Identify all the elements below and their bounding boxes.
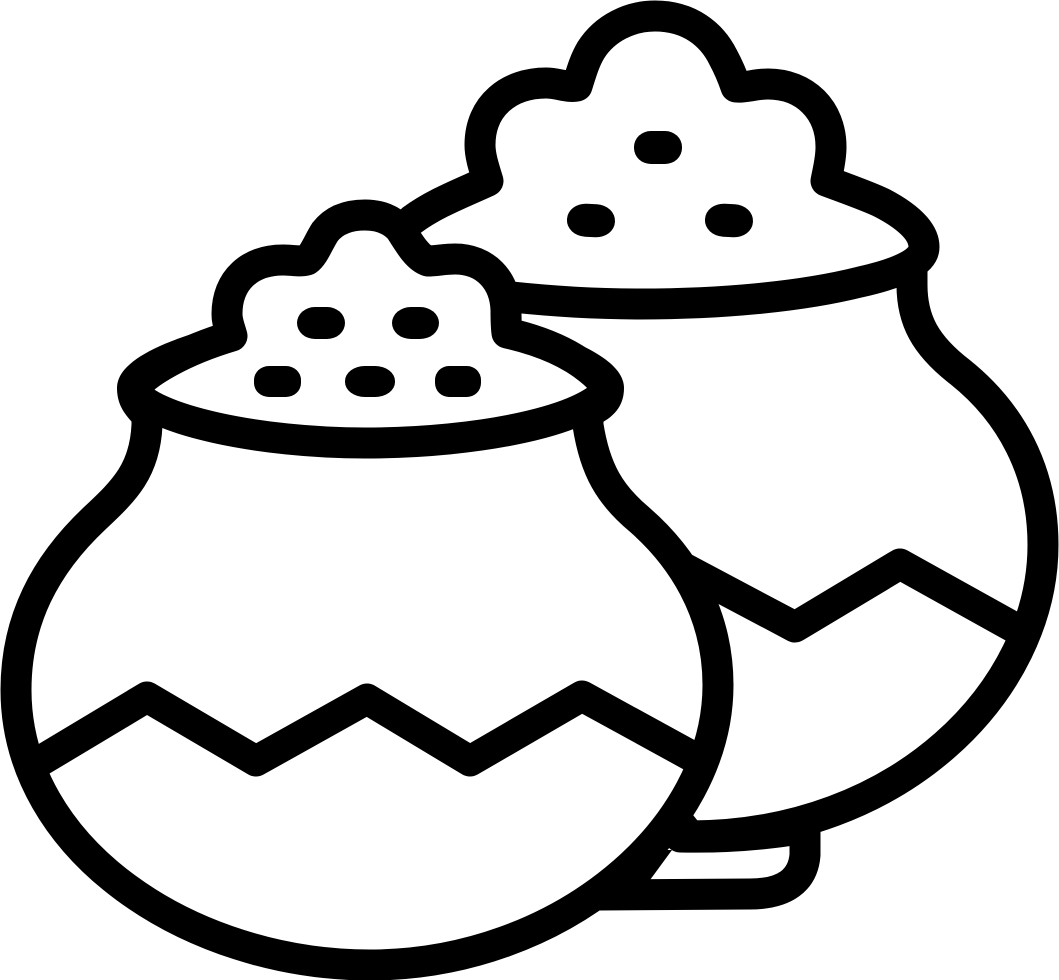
front pot: [16, 215, 718, 965]
front pot rim ends: [117, 325, 624, 430]
front pot mound and rim: [133, 215, 608, 443]
back pot mound and rim: [412, 16, 924, 304]
back pot body: [500, 265, 1043, 836]
front pot grains: [254, 307, 481, 397]
back pot zigzag band: [680, 564, 1015, 628]
back pot: [412, 16, 1043, 895]
back pot foot: [600, 828, 805, 895]
front pot zigzag band: [42, 696, 695, 761]
back pot grains: [566, 131, 754, 238]
front pot body: [16, 400, 718, 965]
